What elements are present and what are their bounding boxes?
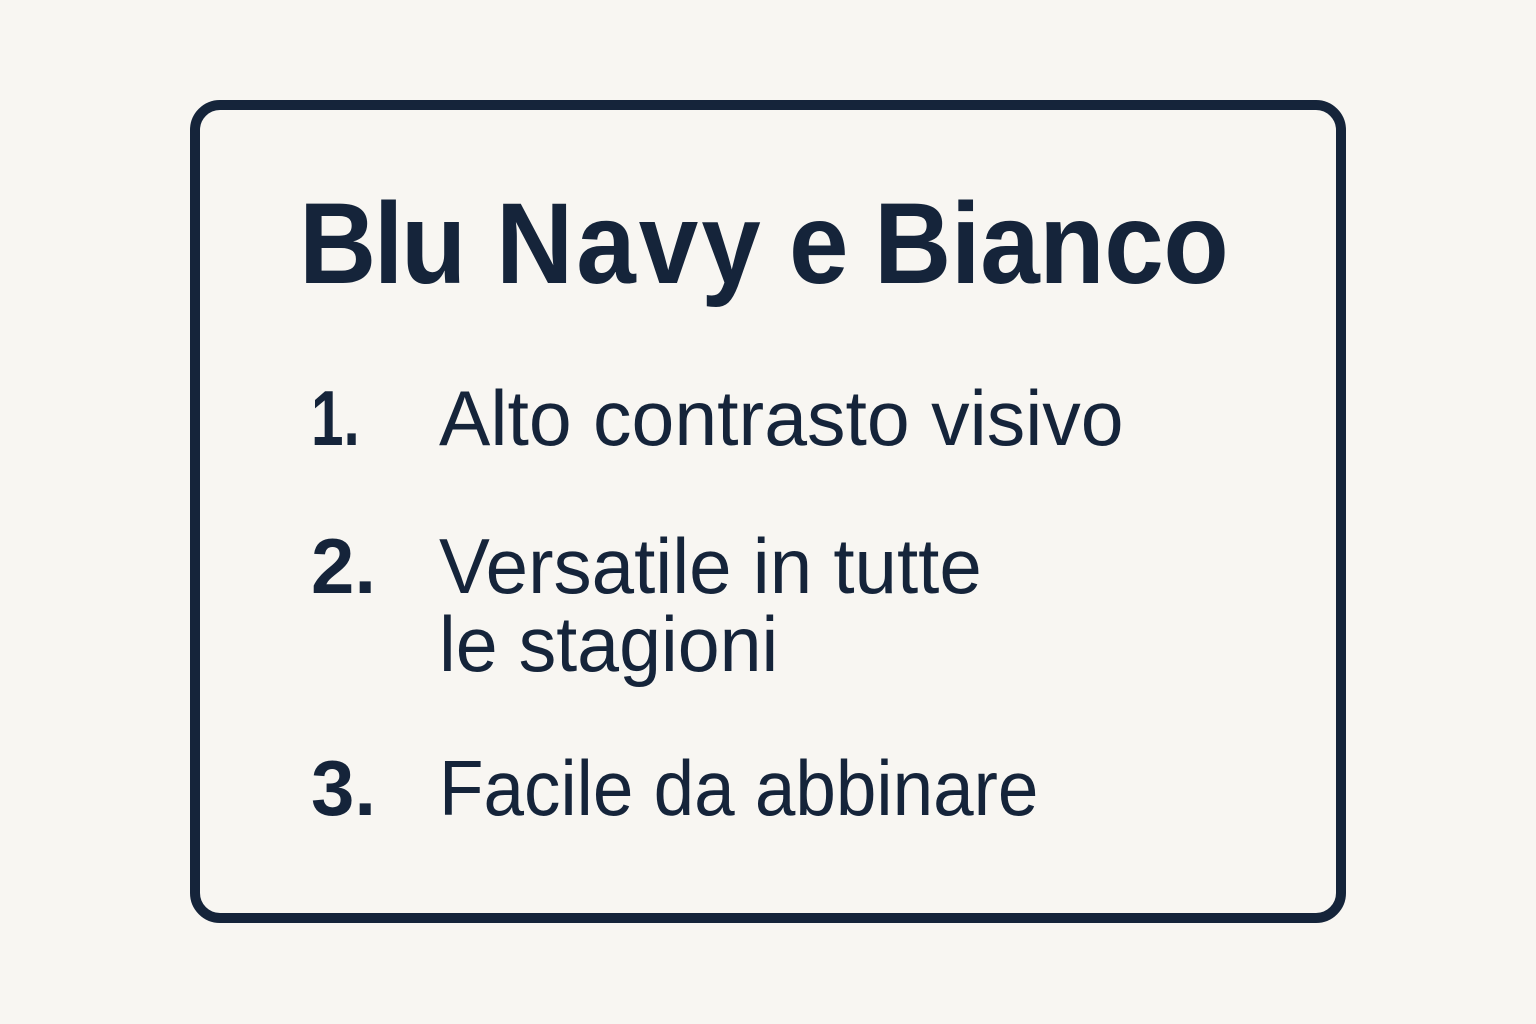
panel: main card — [190, 100, 1346, 923]
list item 3: Facile da abbinare — [439, 744, 1038, 832]
title — [299, 178, 1228, 308]
number 2: 2. — [311, 522, 376, 610]
list item 2 — [439, 522, 982, 688]
list item 2, line 2: le stagioni — [439, 600, 778, 688]
number 1: 1. — [311, 374, 360, 462]
list item 1: Alto contrasto visivo — [439, 374, 1124, 462]
number 3: 3. — [311, 744, 376, 832]
title: e — [789, 178, 849, 308]
title: Blu — [299, 178, 464, 308]
title: Navy — [496, 178, 764, 308]
title: Bianco — [874, 178, 1228, 308]
list item 2, line 1: Versatile in tutte — [439, 522, 982, 610]
